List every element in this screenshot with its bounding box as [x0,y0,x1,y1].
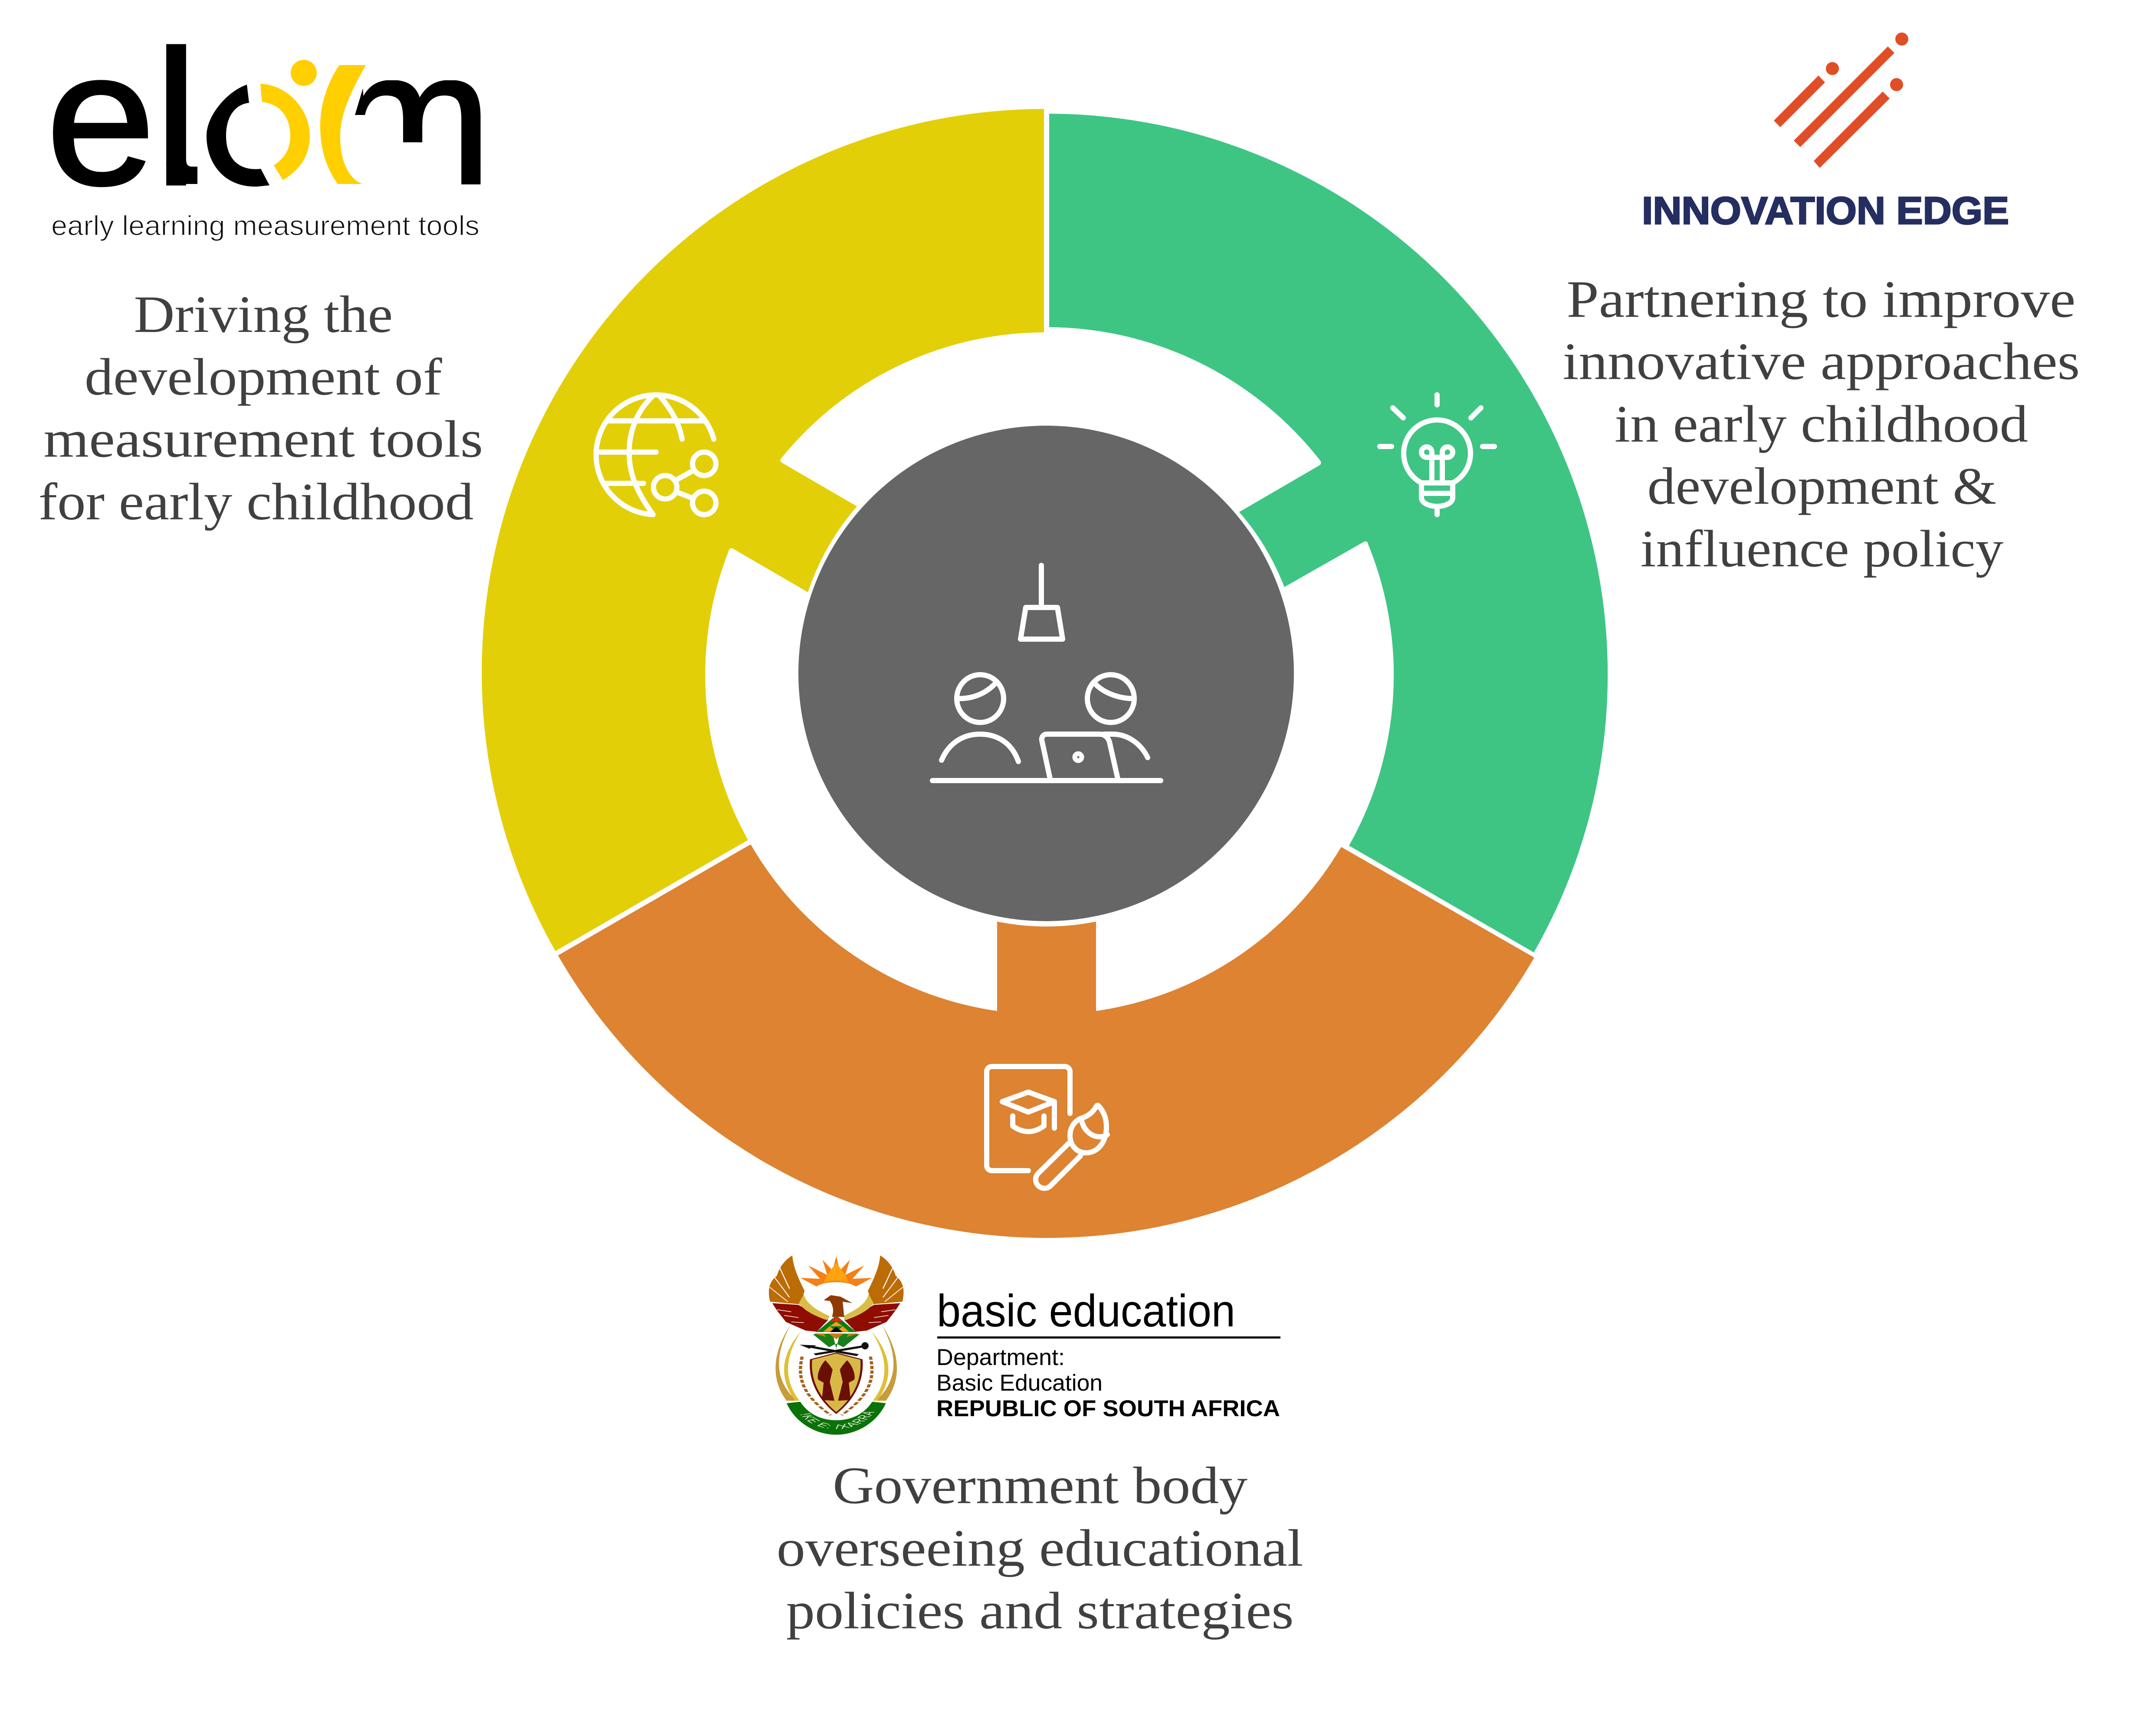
icon: people at a desk with laptop under lamp [932,565,1161,781]
icon: light bulb [1380,395,1494,515]
split ring letter o [207,60,366,187]
text: government description: Government body [833,1457,1248,1515]
wordmark letters: l [155,12,197,225]
tagline: early learning measurement tools [51,210,479,241]
text: government description: overseeing educational [777,1519,1303,1577]
wheat [801,1357,872,1415]
sun [800,1256,872,1286]
ring segment: government (orange) [558,844,1534,1238]
wings [769,1255,830,1332]
wordmark: INNOVATION EDGE [1642,189,2009,232]
text: government description: policies and strategies [786,1582,1294,1640]
letter m: m [333,12,492,225]
motto banner [787,1402,886,1435]
mark: bars and dots [1774,33,1908,168]
wordmark letters: e [46,12,155,225]
bird [824,1295,853,1317]
spear and knobkerrie [809,1346,867,1355]
logo: elom [53,44,481,241]
figures [818,1360,855,1401]
text: government description [777,1457,1303,1640]
text: innovation edge description: Partnering to improve [1566,270,2075,328]
icon: document with graduation cap and paint brush [987,1067,1107,1188]
text: elom description: for early childhood [39,473,473,531]
ring segment: measurement (yellow) [482,109,1044,951]
logo: innovation edge [1642,33,2009,232]
text: elom description: measurement tools [43,410,483,469]
logo: department of basic education [741,1235,1280,1435]
heading: basic education: basic education [937,1286,1235,1336]
text: innovation edge description: innovative approaches [1563,333,2080,391]
tusks [775,1326,897,1401]
text: innovation edge description: influence policy [1641,520,2004,578]
ring segment: innovation (green) [1049,114,1608,952]
department lines: Basic Education [936,1370,1103,1396]
leaves [813,1333,860,1349]
department lines: REPUBLIC OF SOUTH AFRICA [936,1396,1280,1421]
coat of arms: !KE E: /XARRA //KE [741,1235,880,1431]
text: elom description [39,286,483,531]
centre circle [798,426,1294,921]
text: innovation edge description [1563,270,2080,578]
department lines [936,1345,1280,1421]
triangle [817,1316,856,1332]
icon: globe with share nodes [596,395,716,515]
text: innovation edge description: in early childhood [1615,395,2028,453]
text: innovation edge description: development & [1648,457,1996,515]
text: elom description: Driving the [134,286,393,344]
department lines: Department: [936,1345,1065,1370]
shield [811,1353,862,1413]
text: elom description: development of [85,348,442,406]
